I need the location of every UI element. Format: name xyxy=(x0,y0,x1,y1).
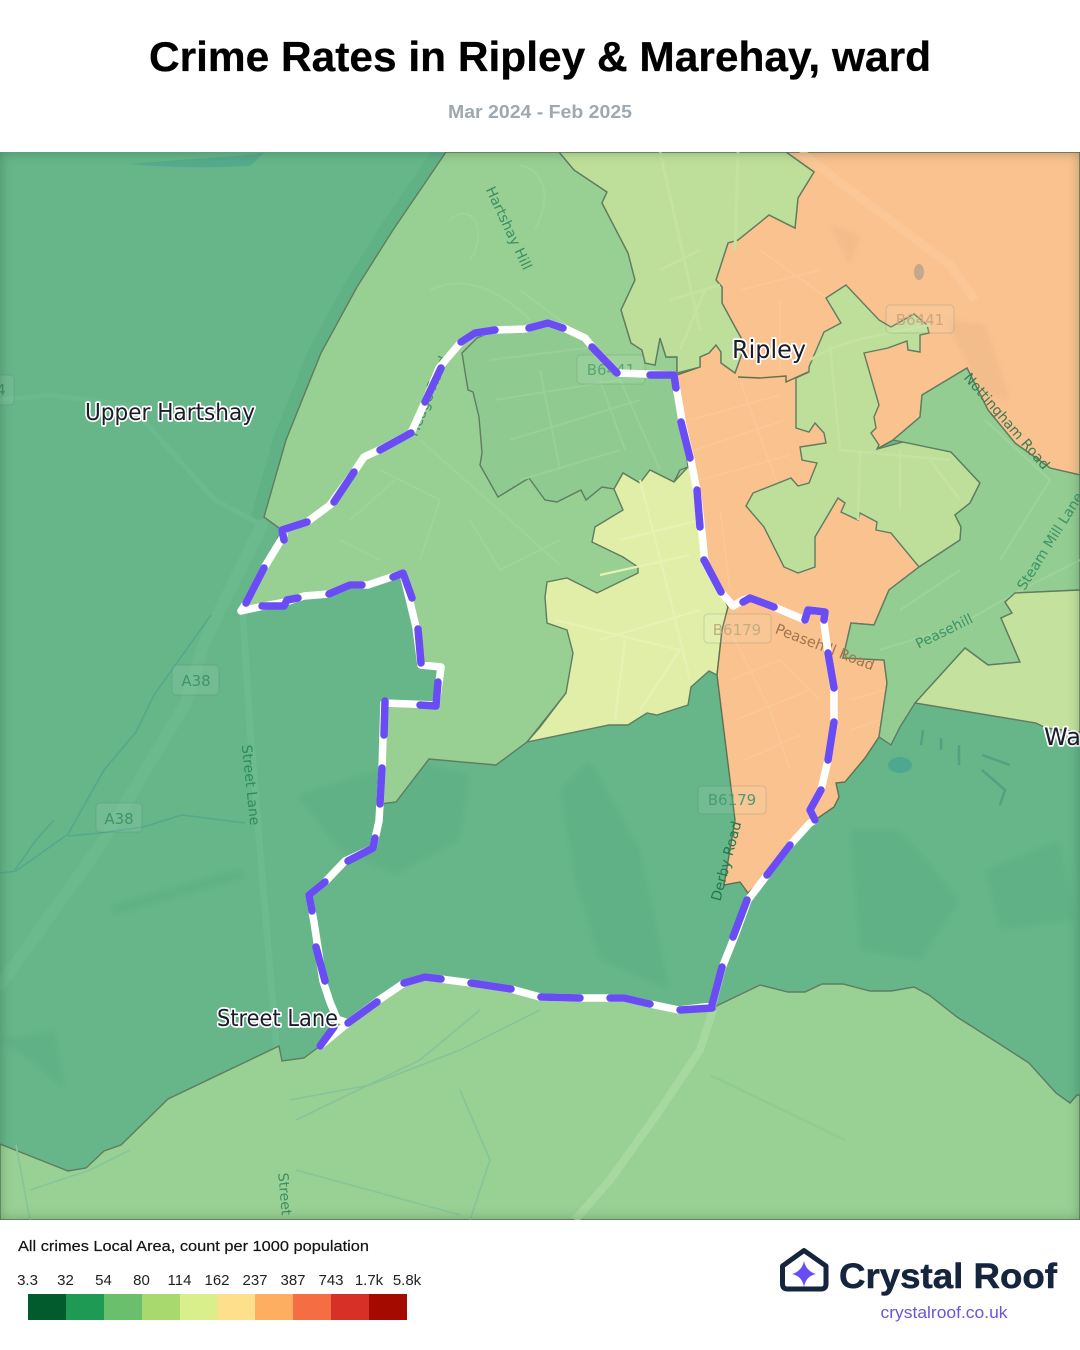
pond: orange area xyxy=(914,264,924,280)
title xyxy=(149,33,931,122)
region: central lime north xyxy=(559,152,814,373)
logo: Crystal Roof xyxy=(780,1248,1058,1322)
region: orange high-crime area xyxy=(677,152,1080,893)
legend values: 162 xyxy=(204,1272,230,1289)
orange streets xyxy=(690,152,975,770)
legend values: 3.3 xyxy=(17,1272,38,1289)
streams xyxy=(0,615,245,873)
label: Hartshay Hill: Hartshay Hill xyxy=(482,184,534,273)
place labels xyxy=(85,335,1080,1032)
ward boundary xyxy=(241,323,834,1046)
region: central lime east xyxy=(746,285,980,573)
Ripley boundary line xyxy=(738,372,808,382)
region: pale yellow-green xyxy=(527,460,728,742)
water: pond xyxy=(888,757,912,773)
label: Heage Road: Heage Road xyxy=(406,354,452,439)
legend values: 114 xyxy=(168,1272,191,1289)
north-west street pattern xyxy=(340,165,600,570)
label: Peasehill: Peasehill xyxy=(913,611,976,653)
label: A38 lower: A38 xyxy=(104,810,134,828)
legend values: 32 xyxy=(57,1272,74,1289)
ward boundary purple dashes xyxy=(246,323,834,1046)
region: eastern green xyxy=(843,368,1080,745)
title: Mar 2024 - Feb 2025 xyxy=(448,101,632,122)
label: Upper Hartshay: Upper Hartshay xyxy=(85,400,255,426)
region: dark green base xyxy=(0,152,1080,1220)
label: Derby Road: Derby Road xyxy=(709,820,745,903)
road labels xyxy=(0,184,1080,1216)
label: B6179 north: B6179 xyxy=(713,621,761,639)
road: A38 corridor xyxy=(0,150,440,1220)
allotment markings xyxy=(921,730,1010,805)
orange darker patches xyxy=(830,225,1010,400)
road shields xyxy=(0,305,954,832)
inner ward streets xyxy=(490,345,660,480)
label: Peasehill Road: Peasehill Road xyxy=(773,622,876,674)
title: Crime Rates in Ripley & Marehay, ward xyxy=(149,33,931,80)
map edge shading xyxy=(0,152,1080,1220)
lime north streets xyxy=(660,152,738,350)
south area roads xyxy=(16,1010,845,1220)
legend xyxy=(17,1238,422,1320)
label: Street bottom: Street xyxy=(274,1172,294,1216)
legend values xyxy=(17,1272,422,1289)
website: crystalroof.co.uk xyxy=(880,1304,1008,1322)
legend values: 80 xyxy=(133,1272,150,1289)
eastern green streets xyxy=(880,420,1080,650)
water: reservoir north xyxy=(130,153,264,167)
legend values: 54 xyxy=(95,1272,112,1289)
region: north-west light green xyxy=(241,152,688,804)
label: B6179 south: B6179 xyxy=(708,791,756,809)
ward boundary white casing xyxy=(241,323,834,1046)
region: inner ward green xyxy=(462,323,688,502)
legend values: 743 xyxy=(318,1272,344,1289)
region: south light green xyxy=(0,977,1080,1220)
legend values: 5.8k xyxy=(393,1272,422,1289)
label: B6441 west: B6441 xyxy=(587,361,635,379)
legend values: 237 xyxy=(242,1272,268,1289)
legend colour scale xyxy=(28,1294,407,1320)
legend values: 1.7k xyxy=(355,1272,384,1289)
choropleth map xyxy=(0,152,1080,1220)
label: Street Lane vertical: Street Lane xyxy=(238,744,262,826)
legend title: All crimes Local Area, count per 1000 population xyxy=(18,1238,369,1255)
label: Ripley: Ripley xyxy=(732,335,806,364)
woodland patches xyxy=(0,760,1075,1090)
icon: house with star xyxy=(782,1250,826,1289)
legend values: 387 xyxy=(280,1272,306,1289)
label: Street Lane: Street Lane xyxy=(217,1006,338,1032)
label: Nottingham Road: Nottingham Road xyxy=(960,370,1052,473)
label: A38 upper: A38 xyxy=(181,672,211,690)
wordmark: Crystal Roof xyxy=(839,1257,1057,1296)
label: B6441 east: B6441 xyxy=(896,311,944,329)
pale region streets xyxy=(555,480,700,720)
region: south-east lime xyxy=(915,590,1080,732)
lime east streets xyxy=(810,325,960,520)
